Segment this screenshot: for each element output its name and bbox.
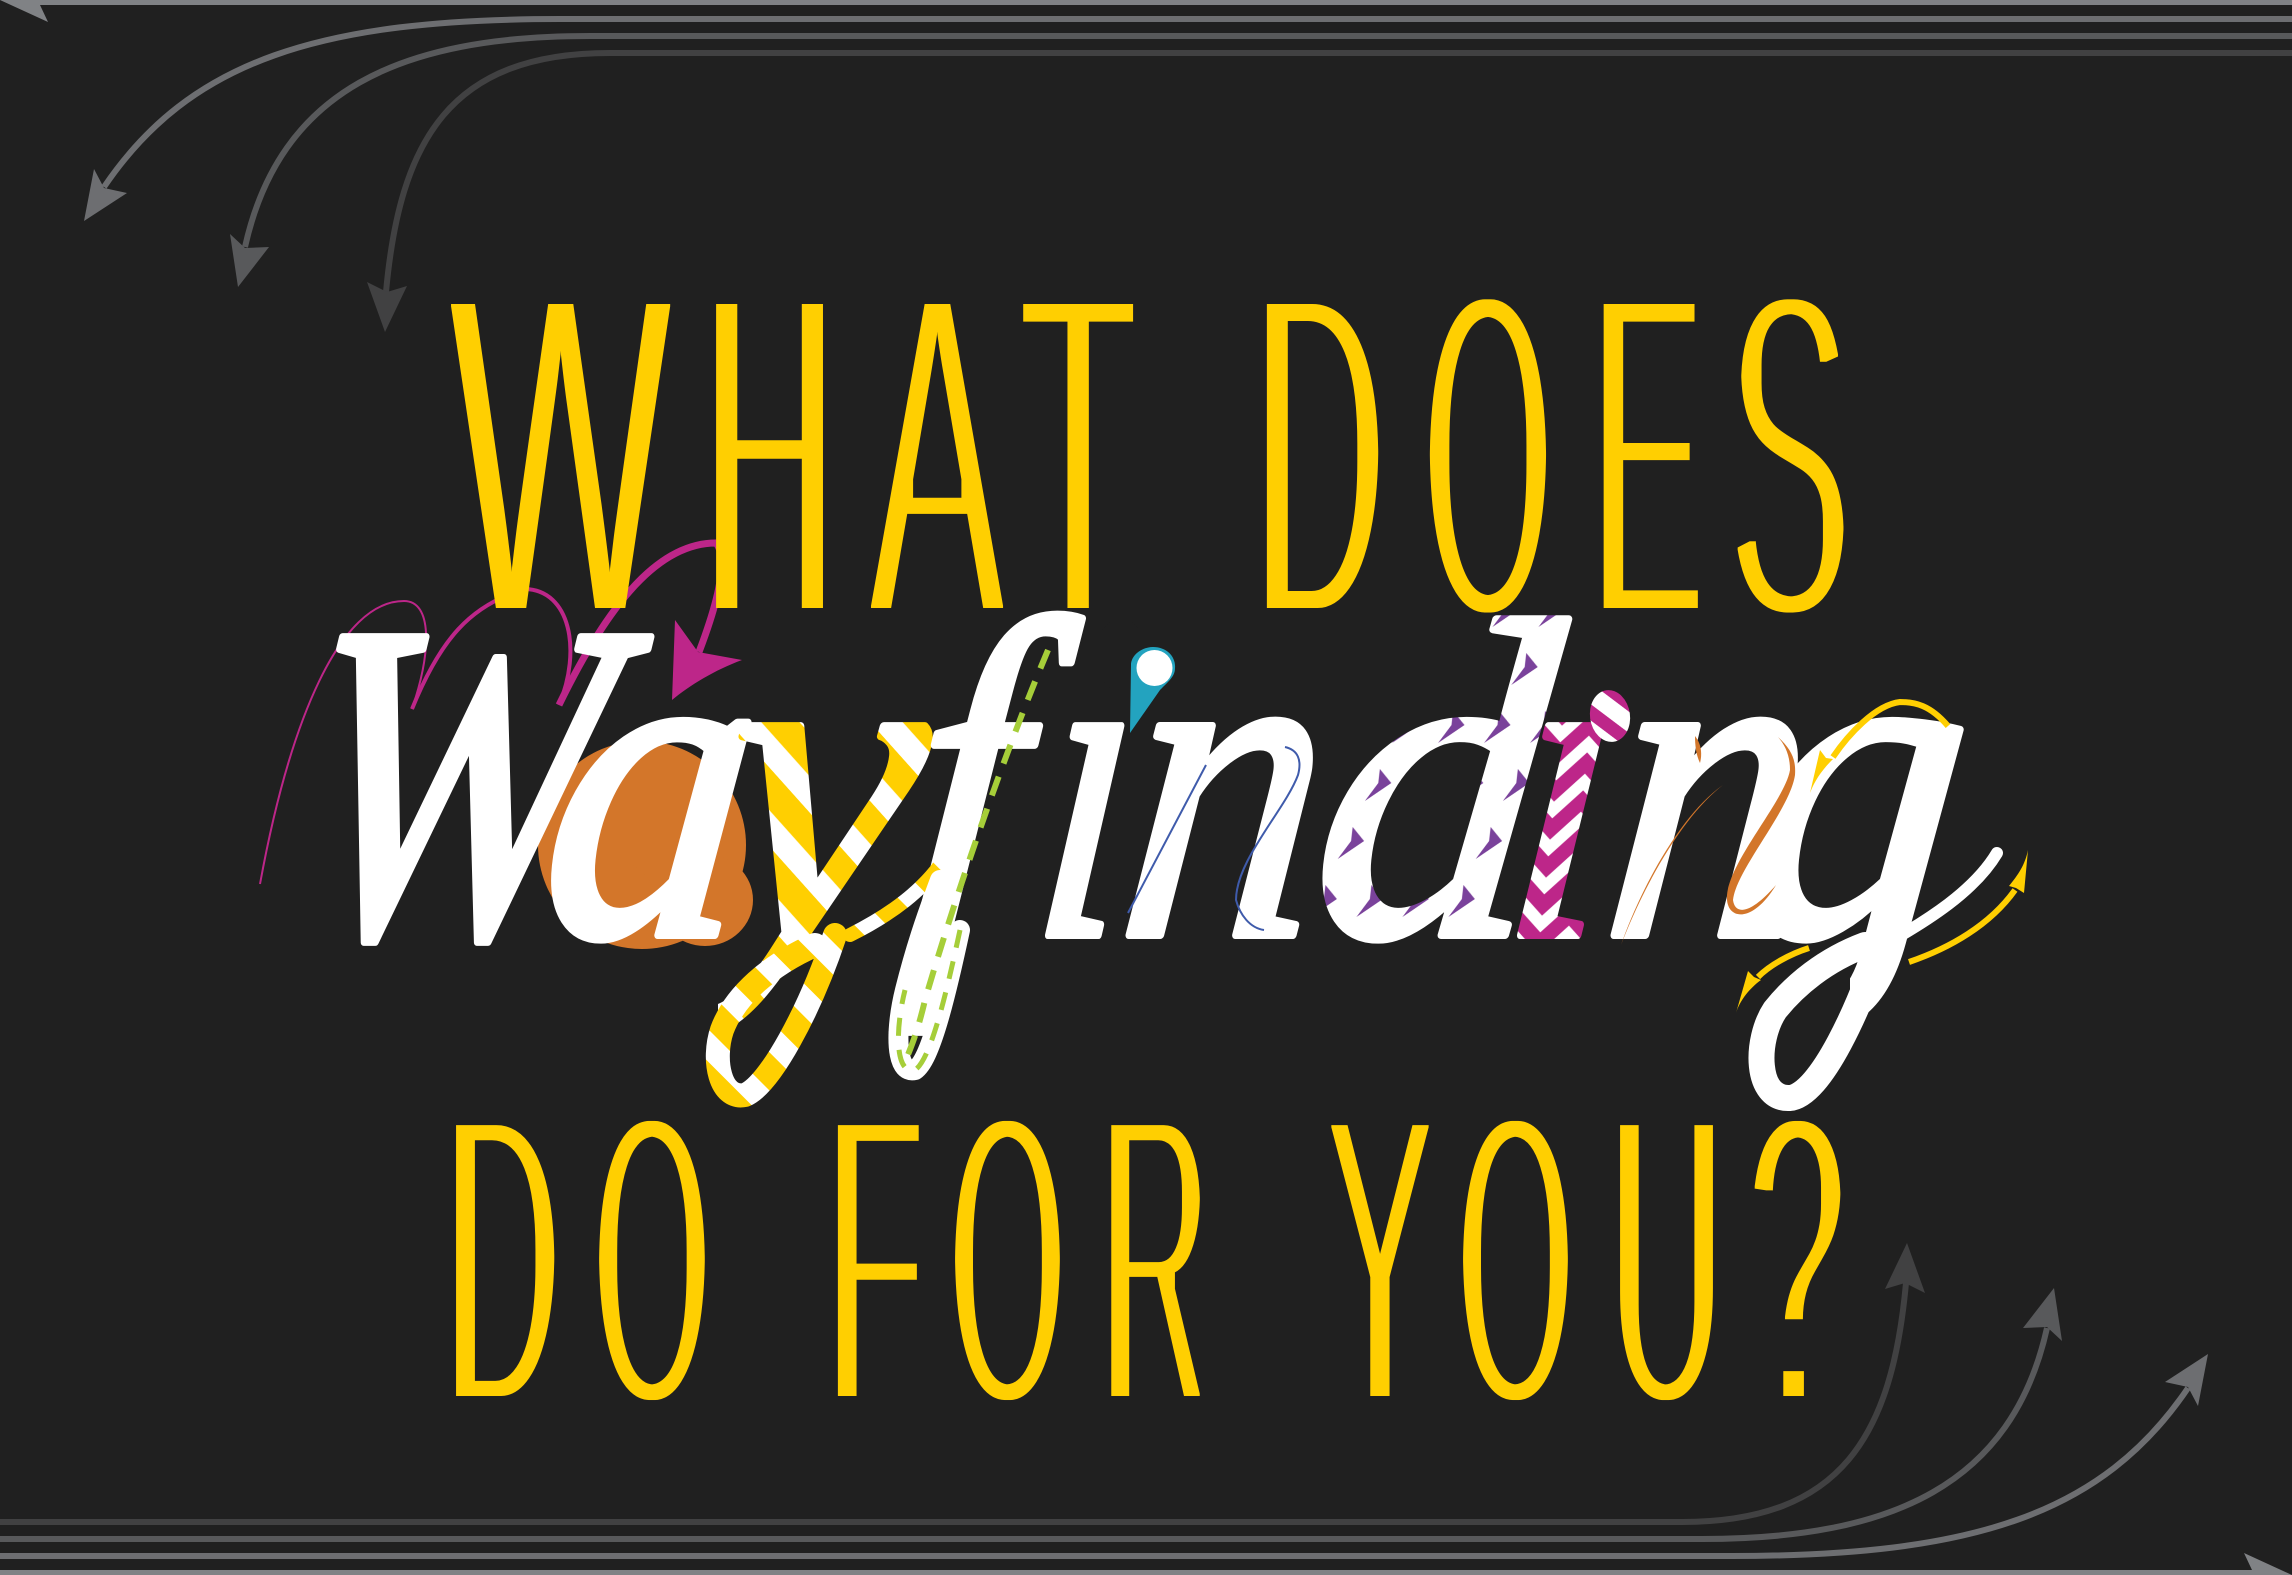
heading line 1: A <box>869 194 1006 717</box>
script word: n <box>1590 531 1838 1034</box>
script word: n <box>1105 531 1353 1034</box>
arrow: second curved <box>230 36 2292 287</box>
text: S <box>1729 194 1850 717</box>
script word <box>275 531 1993 1035</box>
top arrows <box>0 0 2292 332</box>
script word: d <box>1296 531 1584 1034</box>
heading line 1: O <box>1424 194 1552 717</box>
heading line 3: O <box>594 1028 710 1493</box>
decor: y descender swash <box>718 855 947 1095</box>
arrow: bottom edge bar <box>0 1553 2292 1575</box>
arrow: top edge bar <box>0 0 2292 22</box>
script word: a <box>526 531 783 1034</box>
decor: masks over glyph dots and tails <box>652 619 1850 1043</box>
decor: f descender swash with green dashes <box>898 650 1048 1070</box>
arrow: yellow right of g <box>1909 850 2028 962</box>
bottom arrows <box>0 1243 2292 1575</box>
arrow: magenta looping line over W <box>260 543 722 884</box>
decor: orange swashes on n <box>1621 736 1795 945</box>
arrow: bottom second curved <box>0 1288 2062 1539</box>
heading line 1: D <box>1254 194 1385 717</box>
script word: g <box>1725 531 1993 1035</box>
heading line 1: E <box>1592 194 1703 717</box>
heading line 1: H <box>703 194 836 717</box>
heading line 3: U <box>1610 1028 1723 1493</box>
script word: f <box>888 531 1097 1035</box>
icon: striped i dot <box>1587 687 1633 745</box>
arrow: bottom third curved <box>0 1243 1925 1522</box>
arrow: bottom first curved <box>0 1354 2208 1556</box>
script word: i <box>1490 531 1643 1034</box>
arrow: yellow left of g <box>1736 948 1809 1013</box>
heading line 1: W <box>449 194 674 717</box>
icon: magenta arrowhead <box>672 620 742 700</box>
heading line 3: O <box>950 1028 1065 1493</box>
text: ? <box>1748 1028 1845 1493</box>
heading line 3: R <box>1101 1028 1209 1493</box>
script word: i <box>1020 531 1161 1034</box>
heading line 3: O <box>1458 1028 1573 1493</box>
heading line 3: F <box>827 1028 923 1493</box>
decor: blue lines on n <box>1128 747 1299 930</box>
arrow: third curved <box>367 53 2292 332</box>
arrow: first curved <box>84 19 2292 221</box>
arrow: yellow around g top <box>1810 702 1948 793</box>
icon: blue map pin <box>1130 647 1175 733</box>
script word: y <box>660 531 955 1035</box>
heading line 3: Y <box>1325 1028 1435 1493</box>
heading line 1: T <box>1021 194 1132 717</box>
script word: W <box>275 531 667 1034</box>
orange blob behind the a <box>538 741 753 949</box>
heading line 3: D <box>445 1028 560 1493</box>
decor: g descender swash and tail <box>1761 853 1997 1098</box>
